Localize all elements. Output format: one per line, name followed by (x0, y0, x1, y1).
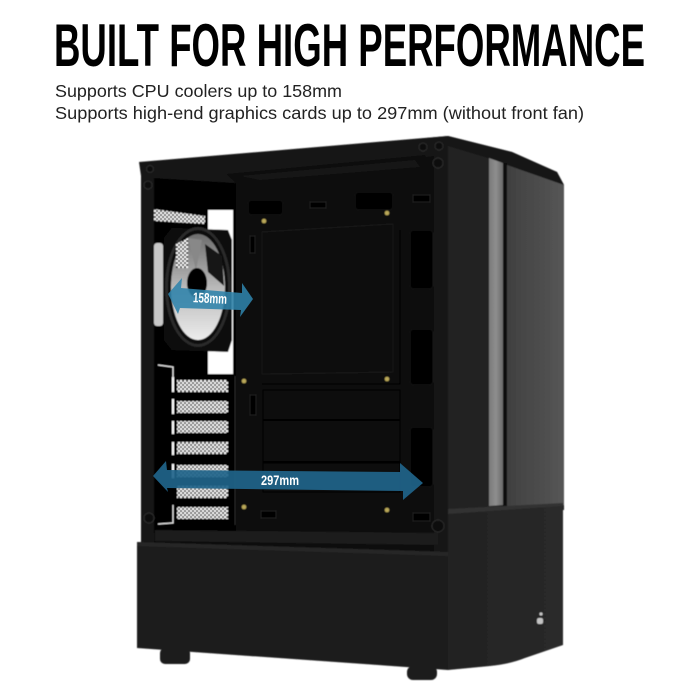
case feet (160, 648, 437, 680)
cable cutouts (248, 192, 433, 487)
expansion slots (158, 365, 235, 525)
light bar (489, 158, 503, 506)
front panel (507, 165, 564, 509)
arrow: 158mm clearance (168, 278, 253, 317)
arrow: 297mm clearance: 297mm (261, 472, 299, 488)
motherboard tray (236, 175, 434, 530)
case body silhouette (141, 136, 448, 553)
thumb screws (144, 142, 444, 532)
side panel (448, 136, 564, 512)
small slots (250, 195, 430, 521)
text block: specifications: Supports CPU coolers up to 158mm (55, 81, 342, 101)
rear fan (164, 227, 232, 352)
CPU cutout (262, 224, 393, 374)
brass standoffs (242, 211, 389, 512)
logo (537, 612, 543, 624)
bottom mesh strip (155, 530, 438, 545)
top beam with mesh (139, 136, 448, 183)
front pillar (434, 136, 448, 553)
arrow: 158mm clearance: 158mm (193, 289, 227, 307)
text block: specifications: Supports high-end graphics cards up to 297mm (without front fan) (55, 103, 584, 123)
arrow: 297mm clearance (153, 461, 423, 500)
rear window opening (154, 178, 236, 533)
front shroud (137, 503, 563, 670)
rear pillar (141, 165, 154, 544)
PC case illustration (137, 136, 564, 680)
tray panels (263, 390, 400, 420)
text block: specifications (55, 81, 584, 123)
